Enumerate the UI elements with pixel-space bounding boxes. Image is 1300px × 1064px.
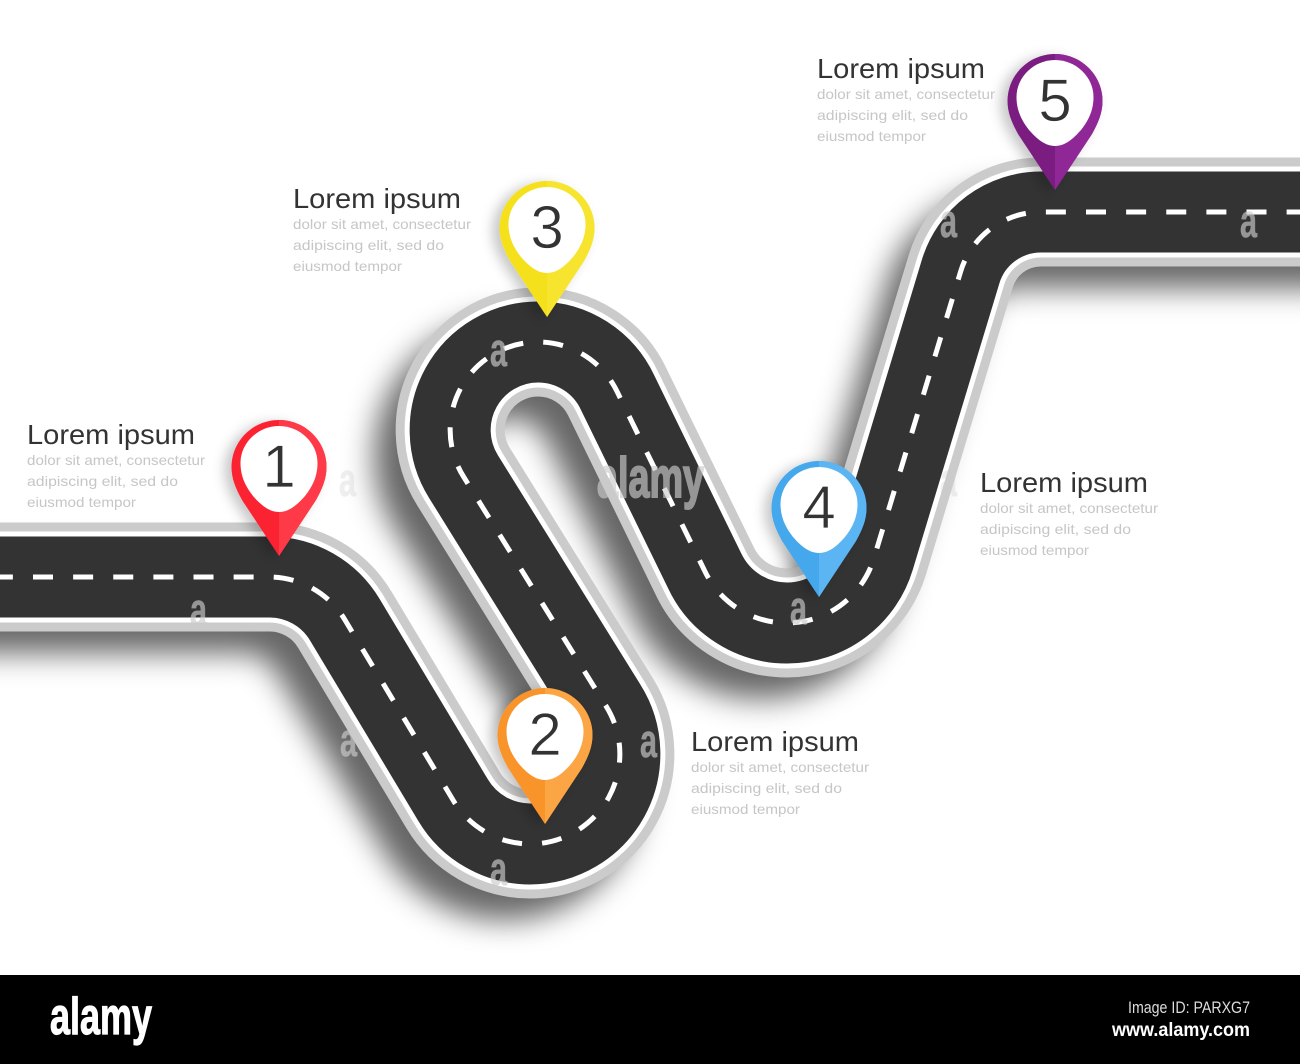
- text block 3: [293, 183, 471, 274]
- text block 2: eiusmod tempor: [691, 801, 800, 817]
- footer logo: alamy: [50, 988, 152, 1046]
- watermark letters: [190, 194, 1258, 895]
- image id: Image ID: PARXG7: [1128, 998, 1250, 1017]
- text block 1: [27, 419, 205, 510]
- pin 5: purple: [1008, 54, 1102, 190]
- pin 1: red: [232, 420, 326, 556]
- text block 2: [691, 726, 869, 817]
- text block 3: Lorem ipsum: [293, 183, 461, 214]
- pin 5: purple: 5: [1038, 67, 1072, 134]
- road asphalt: [0, 212, 1300, 844]
- text block 4: adipiscing elit, sed do: [980, 521, 1131, 537]
- watermark letters: a: [790, 581, 808, 634]
- text block 1: dolor sit amet, consectetur: [27, 452, 205, 468]
- text block 3: dolor sit amet, consectetur: [293, 216, 471, 232]
- watermark letters: a: [340, 713, 358, 766]
- watermark letters: a: [640, 714, 658, 767]
- text block 5: dolor sit amet, consectetur: [817, 86, 995, 102]
- text block 5: eiusmod tempor: [817, 128, 926, 144]
- winding road: [0, 212, 1300, 870]
- road centre dashes: [0, 212, 1300, 844]
- watermark letters: a: [490, 842, 508, 895]
- road outer grey kerb: [0, 212, 1300, 844]
- pin 4: blue: 4: [802, 474, 836, 541]
- text block 4: [980, 467, 1158, 558]
- text block 3: adipiscing elit, sed do: [293, 237, 444, 253]
- website: www.alamy.com: [1111, 1020, 1250, 1041]
- text block 2: Lorem ipsum: [691, 726, 859, 757]
- watermark letters: a: [190, 583, 208, 636]
- pin 1: red: 1: [262, 433, 296, 500]
- watermark letters: a: [940, 453, 958, 506]
- watermark letters: a: [490, 323, 508, 376]
- watermark letters: a: [1240, 194, 1258, 247]
- text block 4: Lorem ipsum: [980, 467, 1148, 498]
- pin 2: orange: [498, 688, 592, 824]
- text block 3: eiusmod tempor: [293, 258, 402, 274]
- watermark letters: a: [940, 194, 958, 247]
- text block 4: dolor sit amet, consectetur: [980, 500, 1158, 516]
- text block 1: eiusmod tempor: [27, 494, 136, 510]
- text block 4: eiusmod tempor: [980, 542, 1089, 558]
- text block 2: adipiscing elit, sed do: [691, 780, 842, 796]
- text block 5: Lorem ipsum: [817, 53, 985, 84]
- text block 2: dolor sit amet, consectetur: [691, 759, 869, 775]
- pin 3: yellow: 3: [530, 194, 564, 261]
- footer bar: [0, 975, 1300, 1064]
- text block 5: [817, 53, 995, 144]
- pin 2: orange: 2: [528, 701, 562, 768]
- watermark letters: a: [339, 453, 357, 506]
- watermark: alamy: alamy: [597, 446, 704, 510]
- pin 3: yellow: [500, 181, 594, 317]
- road white edge: [0, 212, 1300, 844]
- pin 4: blue: [772, 461, 866, 597]
- text block 5: adipiscing elit, sed do: [817, 107, 968, 123]
- road shadow: [0, 238, 1300, 870]
- text block 1: adipiscing elit, sed do: [27, 473, 178, 489]
- text block 1: Lorem ipsum: [27, 419, 195, 450]
